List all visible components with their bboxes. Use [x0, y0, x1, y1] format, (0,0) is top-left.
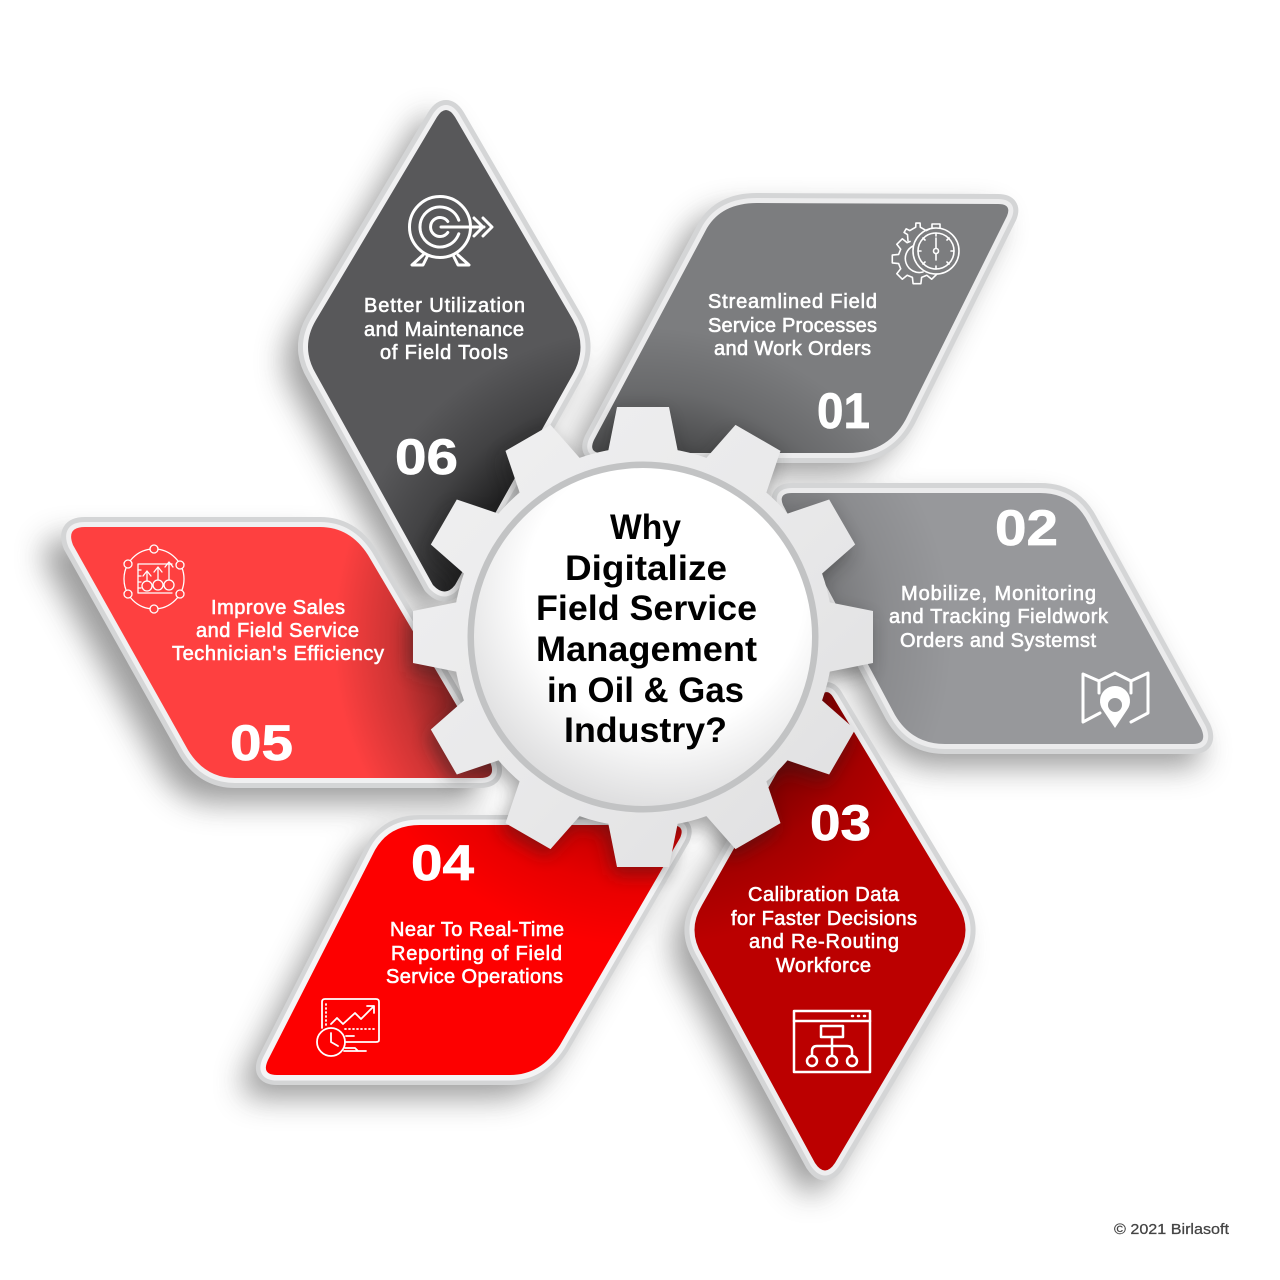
label 05: and Field Service	[196, 620, 359, 642]
number 04: 04	[411, 835, 474, 891]
label 02: Mobilize, Monitoring	[901, 583, 1096, 605]
copyright: © 2021 Birlasoft	[1114, 1222, 1229, 1238]
label 05: Improve Sales	[211, 597, 345, 619]
number 06: 06	[395, 429, 458, 485]
label 03: and Re-Routing	[749, 931, 899, 953]
label 04: Reporting of Field	[391, 943, 562, 965]
number 02: 02	[995, 500, 1058, 556]
title	[536, 508, 757, 750]
title: Industry?	[564, 711, 727, 750]
title: Digitalize	[565, 549, 727, 588]
label 05: Technician's Efficiency	[172, 643, 384, 665]
title: Field Service	[536, 589, 757, 628]
title: Why	[610, 508, 682, 547]
icon: growth chart in cycle	[124, 545, 184, 613]
panel 03: calibration data	[694, 692, 966, 1170]
icon: gear and stopwatch	[892, 223, 959, 284]
label 03: Calibration Data	[748, 884, 900, 906]
label 06: of Field Tools	[380, 342, 508, 364]
panel 06: better utilization	[308, 110, 580, 592]
number 05: 05	[230, 715, 293, 771]
label 03: for Faster Decisions	[731, 908, 917, 930]
center gear	[413, 407, 873, 867]
label 01	[708, 291, 877, 360]
number 01: 01	[817, 383, 870, 439]
gear shadow	[409, 415, 869, 875]
title: Management	[536, 630, 757, 669]
gear ring	[468, 462, 818, 812]
icon: monitor chart with clock	[317, 999, 379, 1056]
label 04: Near To Real-Time	[390, 919, 564, 941]
label 06	[364, 295, 525, 364]
title: in Oil & Gas	[547, 671, 744, 710]
panel drop shadows	[51, 124, 1195, 1186]
icon: target with arrow	[410, 196, 492, 265]
label 04: Service Operations	[386, 966, 563, 988]
label 01: Streamlined Field	[708, 291, 877, 313]
number 03: 03	[810, 795, 871, 851]
label 03: Workforce	[776, 955, 871, 977]
panel 05: improve efficiency	[71, 527, 492, 778]
panel 01: streamlined processes	[592, 203, 1008, 453]
gear face	[474, 468, 812, 806]
label 02	[889, 583, 1109, 652]
label 06: and Maintenance	[364, 319, 524, 341]
label 02: Orders and Systemst	[900, 630, 1096, 652]
icon: site hierarchy window	[794, 1011, 870, 1072]
label 05	[172, 597, 384, 665]
label 02: and Tracking Fieldwork	[889, 606, 1109, 628]
icon: map with pin	[1083, 673, 1148, 728]
panel 02: mobilize and monitoring	[782, 493, 1203, 744]
label 01: Service Processes	[708, 315, 877, 337]
label 01: and Work Orders	[714, 338, 871, 360]
panel 04: real-time reporting	[266, 825, 682, 1075]
label 06: Better Utilization	[364, 295, 525, 317]
label 03	[731, 884, 917, 977]
label 04	[386, 919, 564, 988]
